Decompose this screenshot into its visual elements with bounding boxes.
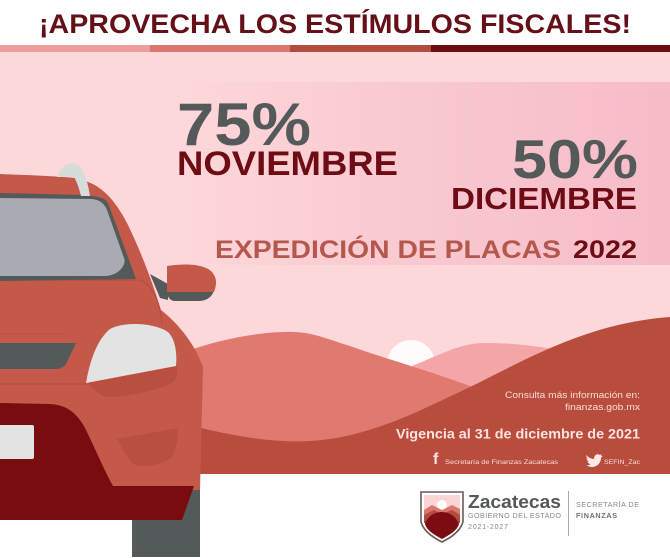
text: 50%: 50% [512, 128, 638, 190]
text: consulta: Consulta más información en: [505, 390, 640, 401]
mirror arm [150, 274, 168, 300]
mirror base [167, 285, 215, 301]
logo [421, 491, 639, 542]
lower grille [0, 403, 194, 520]
logo wordmark: Zacatecas [468, 492, 561, 512]
logo subtitle: GOBIERNO DEL ESTADO [468, 511, 561, 520]
windshield frame [0, 193, 136, 281]
text: twitter account: SEFIN_Zac [604, 460, 640, 466]
headlight shadow [88, 366, 177, 397]
wheel [132, 470, 200, 557]
body [0, 174, 203, 490]
sun [387, 340, 435, 388]
landscape [190, 317, 670, 474]
logo years: 2021-2027 [468, 522, 508, 531]
hill: middle [190, 332, 480, 450]
icon: facebook: f [433, 451, 439, 468]
text: facebook account: Secretaría de Finanzas Zacatecas [445, 460, 558, 466]
panel: gradient band [170, 82, 670, 265]
shield [421, 492, 463, 542]
hill: front [190, 317, 670, 474]
colour strip [0, 45, 670, 52]
text: 75%: 75% [177, 91, 311, 158]
department name bold: FINANZAS [576, 511, 617, 520]
text: noviembre: NOVIEMBRE [177, 145, 398, 183]
air intake [0, 343, 76, 369]
text: expedición de placas: EXPEDICIÓN DE PLACAS [215, 234, 561, 264]
hood seam [0, 280, 162, 325]
headlight [86, 324, 176, 383]
text: website: finanzas.gob.mx [565, 402, 640, 413]
panel: pink background [0, 52, 670, 474]
fog lamp recess [117, 428, 178, 466]
mirror shell [167, 264, 216, 292]
car [0, 163, 216, 557]
text: diciembre: DICIEMBRE [451, 181, 637, 216]
windshield glass [0, 198, 125, 276]
text: vigencia: Vigencia al 31 de diciembre de 2021 [396, 426, 640, 442]
title: ¡APROVECHA LOS ESTÍMULOS FISCALES! [39, 9, 631, 39]
text: 2022: 2022 [573, 236, 637, 264]
license plate [0, 425, 34, 459]
hill: far [412, 343, 560, 420]
department name: SECRETARÍA DE [576, 500, 639, 509]
antenna arc [57, 163, 90, 196]
icon: twitter bird [586, 454, 602, 467]
